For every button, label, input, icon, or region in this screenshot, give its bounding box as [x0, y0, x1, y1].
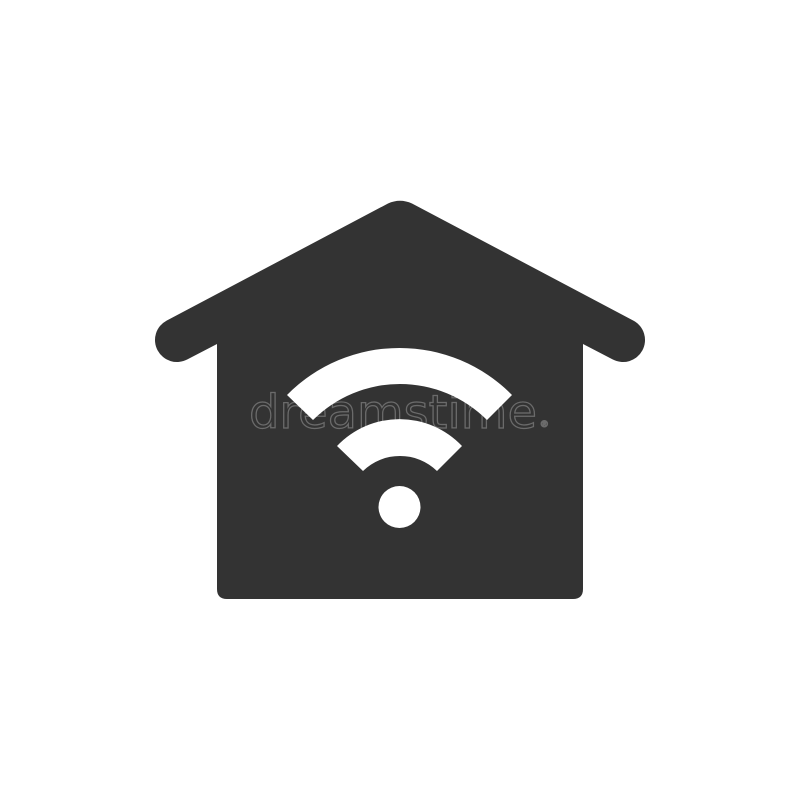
wifi outer arc [287, 348, 512, 420]
icon: house silhouette [155, 201, 645, 599]
watermark: ® [541, 419, 548, 429]
watermark: dreamstime [249, 385, 537, 439]
wifi middle arc [337, 419, 462, 471]
wifi dot [378, 486, 420, 528]
icon: wifi symbol [287, 348, 512, 528]
